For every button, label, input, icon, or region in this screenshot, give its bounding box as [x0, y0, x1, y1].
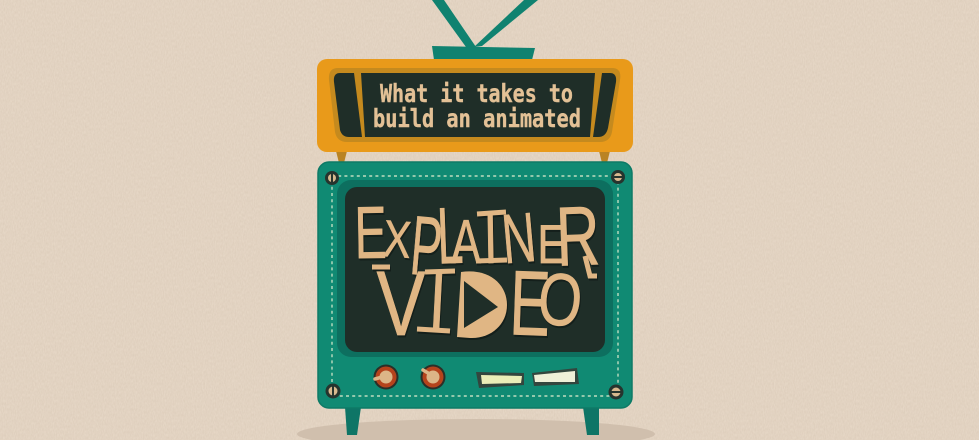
- letter I with bars: [417, 252, 455, 352]
- screen: [345, 187, 605, 352]
- heading: explainer: A: [451, 208, 481, 277]
- D with play triangle: [457, 271, 507, 338]
- icon: screw bottom right: [608, 384, 624, 400]
- letter I with bars: [476, 199, 507, 279]
- heading: explainer: E: [354, 193, 387, 275]
- icon: knob right: [420, 364, 446, 390]
- heading: video: D: [464, 285, 492, 329]
- left display panel: [334, 73, 362, 137]
- V serif: [372, 264, 390, 270]
- letter I with bars: I: [483, 199, 498, 279]
- heading: title text: What it takes to: [380, 79, 573, 108]
- heading: title text: build an animated: [373, 104, 581, 133]
- R tail: [585, 256, 597, 276]
- letter I with bars: I: [426, 252, 449, 352]
- panel: tv body: [318, 162, 632, 408]
- centre display panel: [361, 73, 595, 137]
- panel: title box: [317, 59, 633, 152]
- heading: video: [372, 251, 586, 356]
- heading: explainer: L: [436, 190, 464, 281]
- heading: video: V: [376, 252, 426, 355]
- icon: screw top right: [611, 170, 625, 184]
- legs of tv: [345, 407, 599, 435]
- dashed stitching: [332, 176, 618, 396]
- ground shadow: [297, 419, 655, 440]
- heading: explainer: R: [555, 189, 601, 284]
- top box feet: [336, 151, 610, 163]
- heading: explainer: N: [499, 197, 539, 279]
- icon: knob left: [374, 364, 398, 390]
- icon: screw bottom left: [326, 384, 340, 398]
- icon: antenna: [432, 0, 538, 60]
- icon: screw top left: [325, 171, 339, 185]
- right display panel: [593, 73, 616, 137]
- indicator right: [532, 368, 579, 386]
- heading: explainer: X: [381, 209, 413, 269]
- heading: video: O: [535, 257, 586, 343]
- heading: title text: [373, 79, 581, 133]
- indicator left: [476, 372, 524, 388]
- heading: video: E: [508, 251, 552, 356]
- screen bezel: [337, 180, 613, 357]
- heading: explainer: P: [407, 200, 446, 295]
- display recess: [329, 68, 620, 142]
- heading: explainer: E: [537, 213, 567, 275]
- heading: explainer: [354, 189, 601, 295]
